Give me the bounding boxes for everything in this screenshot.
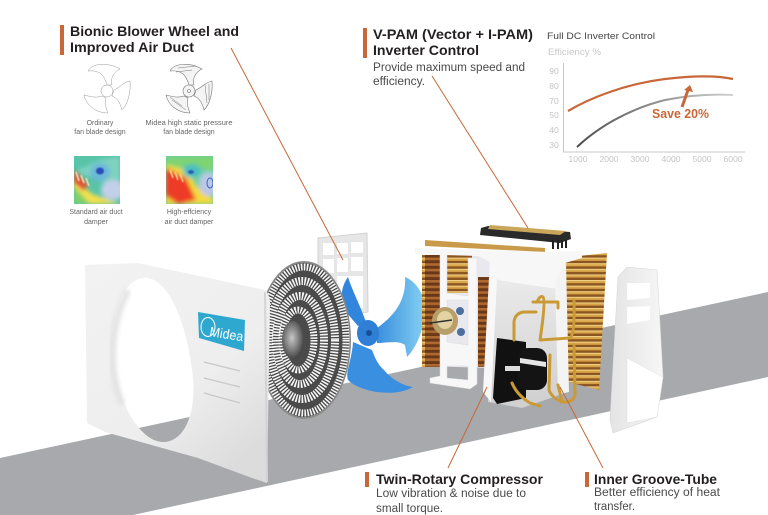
- grey curve: [577, 95, 733, 147]
- heading: bionic blower wheel: Bionic Blower Wheel and: [70, 23, 239, 39]
- y axis labels: 40: [549, 125, 559, 135]
- chart title: Full DC Inverter Control: [547, 31, 655, 42]
- y axis labels: 50: [549, 110, 559, 120]
- Midea logo: [198, 312, 245, 351]
- grey floor seen through opening: [146, 419, 187, 442]
- heading: V-PAM inverter control: V-PAM (Vector + I-PAM): [373, 26, 533, 42]
- callout line: groove tube: [560, 387, 603, 468]
- x axis labels: 3000: [631, 154, 650, 164]
- blue axial fan: [342, 277, 425, 393]
- callout line: compressor: [448, 387, 487, 468]
- arrow: [682, 85, 693, 107]
- heading: bionic blower wheel: Improved Air Duct: [70, 39, 194, 55]
- callout line: blower wheel: [231, 48, 343, 260]
- text: twin-rotary compressor: Low vibration & noise due to: [376, 488, 526, 500]
- fan blade: upper left: [342, 277, 366, 326]
- icon: ordinary fan blade: [84, 64, 130, 113]
- compressor chamber: [415, 248, 582, 408]
- y axis labels: 90: [549, 66, 559, 76]
- x axis labels: 2000: [600, 154, 619, 164]
- chart axis label: Efficiency %: [548, 47, 601, 57]
- fan captions: Ordinary: [87, 120, 114, 127]
- grey floor band: [0, 292, 768, 515]
- heading: V-PAM inverter control: Provide maximum speed and: [373, 62, 525, 74]
- save label: Save 20%: [652, 107, 709, 121]
- icon: Midea high static pressure fan blade: [166, 64, 212, 113]
- text: twin-rotary compressor: Twin-Rotary Compressor: [376, 471, 544, 487]
- text: inner groove-tube: transfer.: [594, 501, 635, 513]
- y axis labels: 70: [549, 96, 559, 106]
- fan captions: Midea high static pressure: [146, 120, 233, 127]
- x axis labels: 4000: [662, 154, 681, 164]
- text: inner groove-tube: Inner Groove-Tube: [594, 471, 717, 487]
- fan blade: right: [377, 277, 425, 357]
- back frame panel: [318, 233, 368, 320]
- heatmap: standard air duct: [74, 156, 125, 204]
- Midea logo: Midea: [209, 324, 245, 344]
- motor: [430, 307, 465, 336]
- wire fan grille: [258, 262, 350, 418]
- heatmap captions: High-effciency: [167, 209, 212, 216]
- fan captions: fan blade design: [74, 129, 126, 136]
- heading: bionic blower wheel: [60, 23, 239, 55]
- panel edge: [265, 292, 267, 482]
- y axis labels: 80: [549, 81, 559, 91]
- copper pipes: [512, 297, 575, 406]
- fan captions: [74, 120, 233, 136]
- fan captions: fan blade design: [163, 129, 215, 136]
- heatmap captions: [69, 209, 214, 226]
- side panel: [610, 267, 663, 433]
- hole rim shading: [113, 290, 128, 405]
- heading: V-PAM inverter control: [363, 26, 533, 88]
- x axis labels: 6000: [724, 154, 743, 164]
- text: inner groove-tube: Better efficiency of heat: [594, 487, 721, 499]
- x axis labels: 5000: [693, 154, 712, 164]
- text: twin-rotary compressor: small torque.: [376, 503, 443, 515]
- top control board: [480, 225, 571, 249]
- heading: V-PAM inverter control: efficiency.: [373, 76, 425, 88]
- heatmap captions: damper: [84, 219, 109, 226]
- callout line: V-PAM: [432, 76, 528, 228]
- text: inner groove-tube: [585, 471, 721, 513]
- y axis labels: 30: [549, 140, 559, 150]
- front panel with circular opening: [85, 263, 270, 483]
- condenser coil: [422, 240, 607, 390]
- panel grooves: [204, 362, 240, 403]
- x axis labels: 1000: [569, 154, 588, 164]
- heading: V-PAM inverter control: Inverter Control: [373, 42, 479, 58]
- heatmap: high-efficiency air duct: [166, 156, 217, 204]
- line chart: efficiency: [547, 31, 745, 164]
- x axis labels: [569, 154, 743, 164]
- heatmap captions: Standard air duct: [69, 209, 123, 216]
- fan blade: lower: [347, 342, 413, 393]
- orange curve: [568, 76, 733, 111]
- fan hub: [357, 320, 379, 346]
- compressor: [493, 338, 547, 404]
- axes: [564, 63, 745, 152]
- heatmap captions: air duct damper: [165, 219, 214, 226]
- inner white bracket: [430, 252, 477, 389]
- y axis labels: [549, 66, 559, 150]
- text: twin-rotary compressor: [365, 471, 544, 515]
